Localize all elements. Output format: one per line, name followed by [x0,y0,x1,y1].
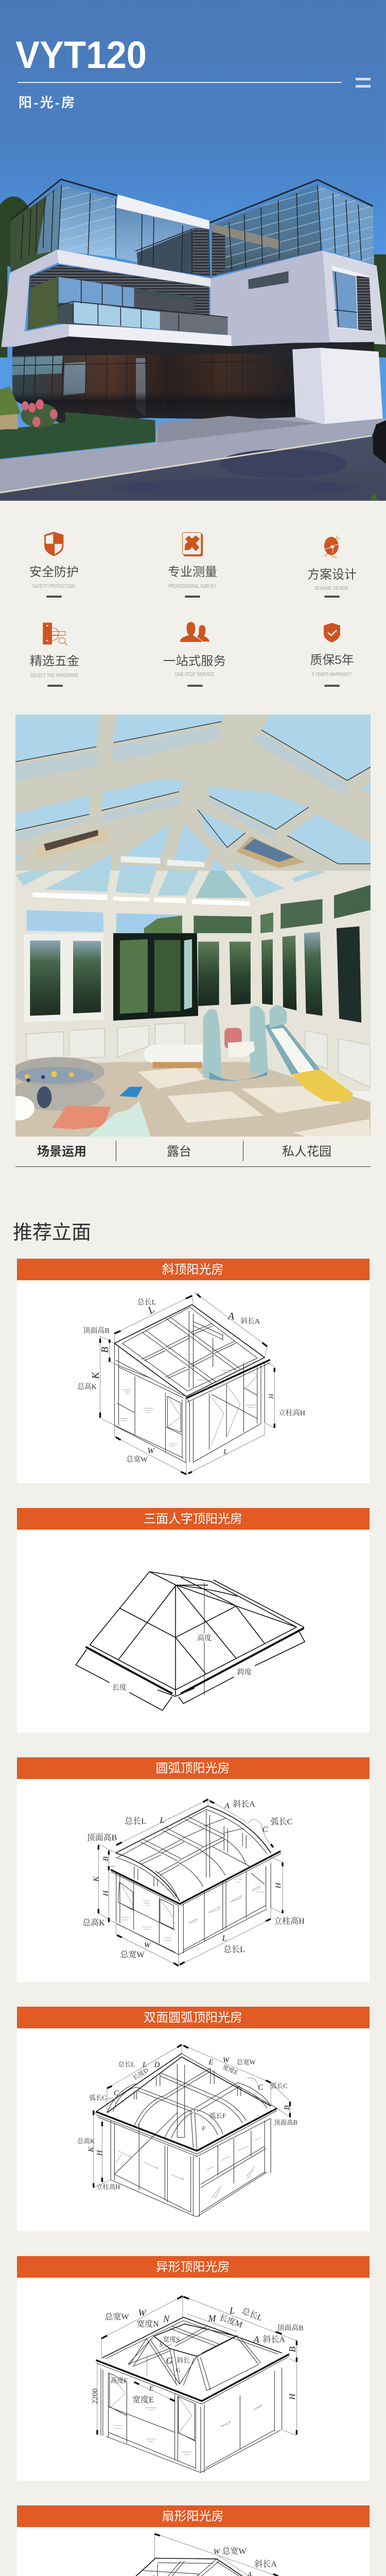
feature icon grid [29,532,357,687]
diagram labels: 总长L [125,1817,146,1826]
diagram labels: 弧长C [270,2082,288,2090]
pavement [0,417,386,494]
diagram: gable roof [76,1572,305,1710]
trees behind building [0,196,386,358]
diagram labels: W [214,2548,221,2556]
diagram labels: W [138,2308,147,2318]
diagram labels [77,2056,297,2191]
right window recess [332,266,373,332]
feature: 5 years warranty [310,623,354,687]
white pillar [292,348,325,424]
diagram labels: 总高K [77,2137,95,2145]
panel header [17,2505,370,2527]
diagram labels: 宽度E [132,2395,154,2404]
blue book [119,1087,143,1097]
usage header: 场景运用 [37,1145,86,1159]
diagram labels: W [147,1447,155,1455]
diagram labels: L [146,1303,156,1317]
feature: safety protection: 安全防护 [29,565,79,579]
diagram labels [91,2306,304,2404]
diagram labels [82,1800,305,1959]
glazing bars [0,726,346,846]
diagram labels: 总长L [137,1298,156,1307]
right upper walls [210,250,329,347]
panel body [17,2028,370,2231]
diagram labels: M [208,2313,216,2324]
diagram: double arched roof [77,2045,297,2217]
road [0,432,386,501]
diagram labels: 高度F [110,2377,128,2384]
diagram labels: L [160,1816,165,1825]
ground floor band [12,336,374,357]
floor [15,1062,371,1137]
diagram labels: 立柱高H [274,1916,305,1926]
diagram labels: 长度M [218,2313,244,2330]
diagram labels: 长度D [131,2066,150,2081]
diagram labels: L [223,1448,227,1456]
diagram labels: G [176,2366,181,2374]
diagram labels: H [96,2149,104,2156]
roof lines [11,179,373,223]
feature: select the hardware [30,622,79,687]
diagram labels: E [149,2385,154,2393]
diagram labels: 顶面高B [277,2324,304,2332]
diagram labels: H [288,2393,297,2400]
panel header [17,1259,370,1280]
diagram labels: 总宽W [120,1950,145,1959]
diagram labels: 弧长C [271,1817,292,1826]
window transoms [27,885,371,933]
subtitle: 阳-光-房 [19,95,75,110]
upper floor right glass [212,184,374,276]
diagram labels: L [222,1934,227,1943]
diagram labels: C [258,2083,264,2092]
diagram labels: H [102,1890,110,1896]
diagram labels: K [87,2146,95,2153]
diagram labels: 总高K [77,1382,97,1391]
feature: one-stop service: ONE-STOP SERVICE [175,672,215,677]
panel: fan-shaped sunroom [17,2505,370,2576]
mint toy [89,1101,151,1137]
panel: slanted roof sunroom [17,1259,370,1483]
diagram labels: C [262,1825,268,1834]
diagram labels: K [92,1876,100,1882]
panel header [17,1508,370,1530]
slide [265,1005,353,1101]
feature: professional survey: 专业测量 [168,565,217,579]
menu bars icon [356,78,371,88]
diagram labels: W [144,1941,151,1950]
panel body [17,2527,370,2576]
diagram labels: 宽度E [221,2063,239,2076]
diagram labels: 宽度S [163,2335,180,2343]
diagram labels: D [154,2061,160,2069]
pink cushion [52,1106,111,1129]
diagram: irregular roof [91,2296,304,2472]
panel header: 扇形阳光房 [162,2510,223,2523]
feature: scheme design: 方案设计 [307,568,357,582]
diagram labels: 斜长A [233,1800,255,1809]
panel: arched roof sunroom [17,1757,370,1982]
white roof beam [116,195,209,229]
section heading: 推荐立面 [13,1222,91,1244]
diagram labels: 弧长F [209,2112,226,2120]
left box wall [1,249,232,347]
mattress [144,1044,203,1068]
diagram labels: E [208,2058,214,2066]
bottom foliage tip [369,493,378,501]
sky [0,0,386,501]
diagram labels: 顶面高B [83,1326,110,1335]
white table [15,1096,34,1121]
slit window [248,271,289,289]
diagram labels: L [142,2061,147,2069]
window casements [24,926,361,1023]
feature: select the hardware: 精选五金 [30,654,79,668]
diagram labels: 立柱高H [96,2183,120,2191]
feature: select the hardware: SELECT THE HARDWARE [30,673,79,679]
feature: one-stop service [163,622,226,687]
diagram labels: H [267,1394,275,1399]
panel body [17,2278,370,2481]
panel: double arched roof sunroom [17,2007,370,2231]
skylight left [34,828,111,859]
diagram labels [130,2547,283,2576]
planter and flowers [0,386,58,429]
diagram labels: B [283,2105,291,2110]
ground floor glazing [12,353,295,423]
panel body [17,1280,370,1483]
diagram labels: 高度 [197,1634,212,1642]
feature: scheme design: SCHEME DESIGN [315,586,348,591]
diagram labels: 总长L [223,1945,245,1954]
panel: irregular roof sunroom [17,2256,370,2481]
feature: safety protection [29,532,79,598]
diagram labels: A [253,2334,259,2345]
diagram labels: G [166,2355,173,2366]
white light strip [32,892,108,901]
diagram labels: W [223,2056,230,2064]
diagram labels: B [287,2346,297,2352]
diagram labels: C [114,2089,119,2097]
panel header [17,1757,370,1779]
diagram labels: A [224,1802,230,1810]
lower interior [3,854,371,1137]
panel body [17,1779,370,1982]
hedge [0,412,155,459]
diagram labels: 顶面高B [274,2119,297,2126]
diagram labels: F [201,2125,206,2132]
panel header: 圆弧顶阳光房 [155,1761,230,1775]
panel header: 三面人字顶阳光房 [144,1512,242,1526]
usage: private garden: 私人花园 [282,1145,331,1159]
diagram labels: 斜长A [254,2560,277,2569]
wall base [15,858,371,1091]
scene photo: sunroom interior [0,714,371,1137]
diagram labels: 2200 [91,2388,99,2404]
diagram labels: N [163,2314,170,2324]
diagram labels [112,1634,252,1692]
diagram labels: 总宽W [237,2059,256,2066]
glass panes [0,714,371,871]
diagram labels: 总宽W [104,2312,129,2321]
diagram labels [77,1298,305,1464]
diagram labels: 总长L [240,2306,264,2323]
skylight right [236,836,305,868]
diagram labels: 总宽W [126,1455,148,1464]
diagram labels: L [229,2306,235,2316]
lower wall panels [26,1023,371,1088]
pane edge shadows [0,722,371,864]
panel: three-sided gable roof sunroom [17,1508,370,1733]
diagram labels: A [227,1311,235,1322]
diagram labels: K [90,1371,101,1380]
diagram labels: 立柱高H [278,1409,305,1417]
diagram labels: 总宽W [222,2547,247,2556]
diagram labels: 斜长A [262,2335,285,2344]
recessed middle floor glazing [28,265,227,335]
feature: scheme design [307,535,357,598]
diagram labels: 斜长 [177,2357,190,2364]
feature: safety protection: SAFETY PROTECTION [32,584,75,589]
diagram labels: 长度 [112,1683,127,1692]
diagram labels: H [274,1882,283,1889]
swing set [203,1006,268,1081]
diagram: slanted roof [77,1292,305,1475]
diagram labels: S [160,2341,163,2348]
title VYT120: VYT120 [15,33,147,76]
panel body [17,1530,370,1733]
diagram labels: 宽度N [136,2319,159,2329]
title rule [17,82,342,83]
panel header [17,2007,370,2028]
feature: professional survey: PROFESSIONAL SURVEY [169,584,217,589]
diagram labels: B [99,1347,111,1353]
roof structure [0,714,371,871]
upper floor left glass [10,185,210,277]
white grid bars [121,856,161,864]
scene usage table [15,1141,371,1167]
usage: terrace: 露台 [167,1145,191,1159]
roof panes lower row [16,871,325,898]
ball pool [11,1057,104,1111]
panel header: 异形顶阳光房 [155,2260,230,2274]
diagram labels: 总高K [82,1918,105,1927]
diagram labels: B [102,1856,110,1861]
diagram labels: 顶面高B [87,1833,117,1842]
hero: building photo illustration [0,0,386,501]
panel header [17,2256,370,2278]
diagram: arched roof [82,1800,305,1966]
diagram labels: 跨度 [237,1668,252,1676]
diagram: fan-shaped [112,2533,283,2576]
diagram labels: 弧长C [89,2094,107,2102]
feature: one-stop service: 一站式服务 [163,654,226,668]
feature: 5 years warranty: 质保5年 [310,653,354,667]
panel header: 斜顶阳光房 [162,1263,223,1277]
diagram labels: 斜长A [240,1317,260,1326]
car [373,420,386,464]
diagram labels: 总长L [118,2061,135,2068]
panel header: 双面圆弧顶阳光房 [144,2011,242,2025]
feature: 5 years warranty: 5 YEARS WARRANTY [312,672,352,677]
feature: professional survey [168,533,217,598]
